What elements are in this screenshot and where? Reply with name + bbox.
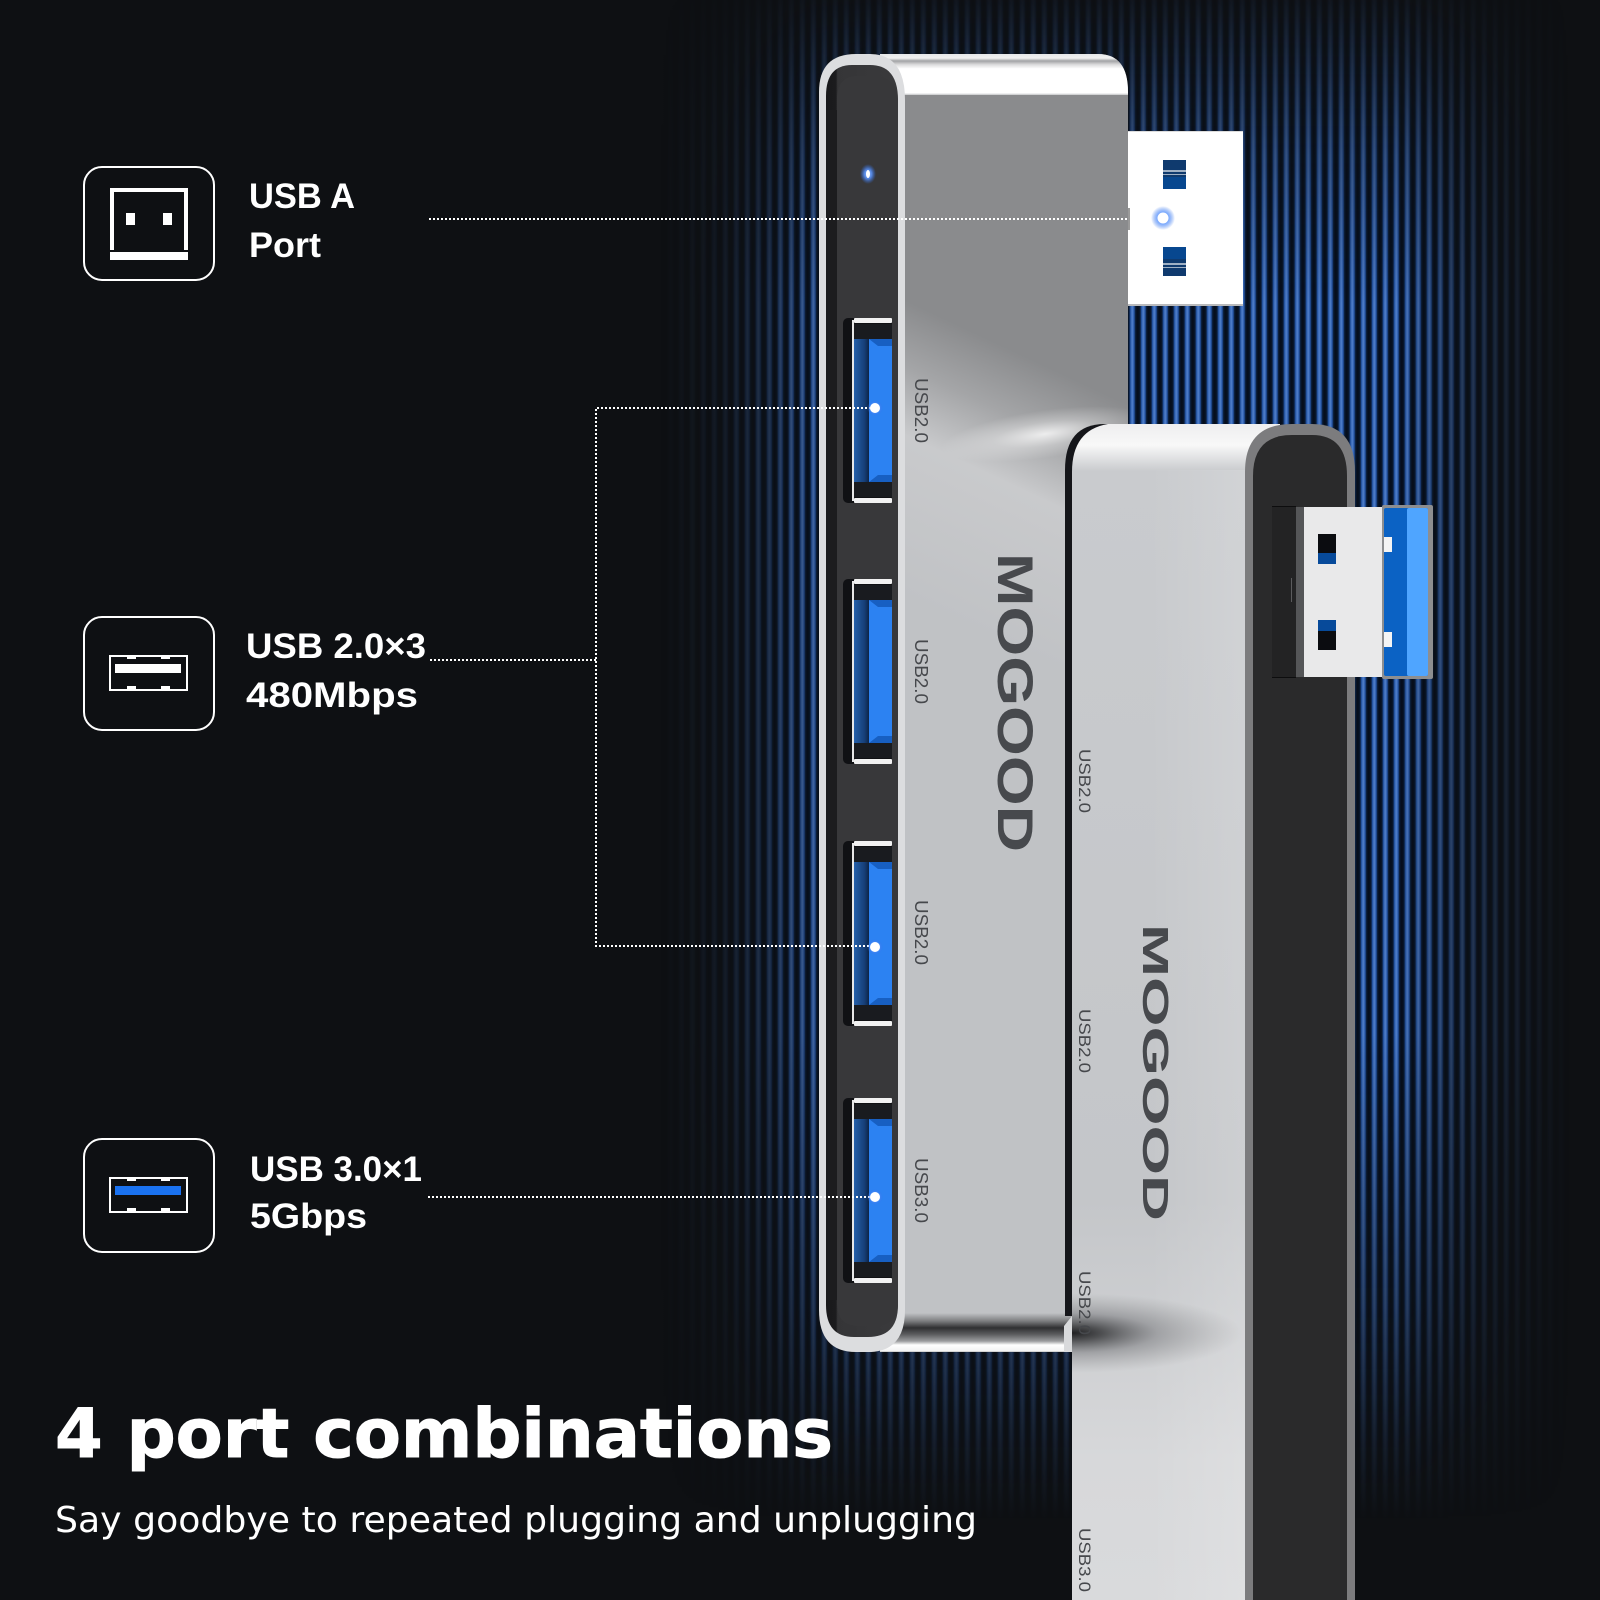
front hub logo: MOGOOD [1135,924,1176,1221]
front hub port labels: USB3.0 [1075,1528,1093,1592]
rear hub port labels: USB2.0 [911,639,932,704]
label: USB A Port: USB A [249,177,355,216]
label: USB 3.0×1 5Gbps: 5Gbps [250,1197,367,1236]
icon: USB A port [84,167,214,280]
label: USB 3.0×1 5Gbps [250,1150,422,1236]
rear hub logo: MOGOOD [987,553,1043,852]
USB port 4 [843,1098,892,1283]
plug hole: upper [1318,534,1336,564]
front hub port labels: USB2.0 [1075,1271,1093,1335]
subtitle: Say goodbye to repeated plugging and unplugging [55,1500,977,1541]
hub body: rear [880,54,1152,1354]
front hub port labels: USB2.0 [1075,1009,1093,1073]
hub body: front [1072,424,1280,1600]
rear hub port labels: USB2.0 [911,378,932,443]
front hub port labels: USB2.0 [1075,749,1093,813]
rear hub port labels [911,378,932,1223]
rear hub port labels: USB3.0 [911,1158,932,1223]
hub rim: front [1245,424,1355,1600]
label: USB A Port [249,177,355,265]
label: USB 2.0×3 480Mbps: 480Mbps [246,676,418,715]
plug hole: lower [1318,620,1336,650]
label: USB 3.0×1 5Gbps: USB 3.0×1 [250,1150,422,1189]
LED indicator [860,164,876,184]
rear hub port labels: USB2.0 [911,900,932,965]
callout line: USB 3.0 [428,1189,883,1205]
callout line: USB A [429,206,1175,230]
hub body: front edge [1065,424,1120,1316]
label: USB 2.0×3 480Mbps: USB 2.0×3 [246,627,426,666]
icon: USB 2.0 port [84,617,214,730]
USB port 1 [843,318,892,503]
icon: USB 3.0 port [84,1139,214,1252]
background: blue vertical stripes [691,0,1551,1492]
front hub port labels [1075,749,1093,1592]
USB port 3 [843,841,892,1026]
hub face: front [1253,435,1347,1600]
callout line: USB 2.0 bracket [430,400,883,955]
product: front USB hub [1064,424,1355,1600]
product: rear USB hub [819,54,1243,1354]
title: 4 port combinations [55,1395,833,1474]
USB port 2 [843,579,892,764]
hub rear band overlap [1064,1316,1072,1352]
plug hole: upper [1163,160,1186,189]
plug: rear USB A connector [1128,131,1243,306]
shadow cast on front hub [1072,1298,1224,1368]
hub front face with rim [819,54,905,1352]
label: USB A Port: Port [249,226,321,265]
label: USB 2.0×3 480Mbps [246,627,426,715]
plug hole: lower [1163,247,1186,276]
plug: front USB 3.0 connector [1272,505,1433,679]
